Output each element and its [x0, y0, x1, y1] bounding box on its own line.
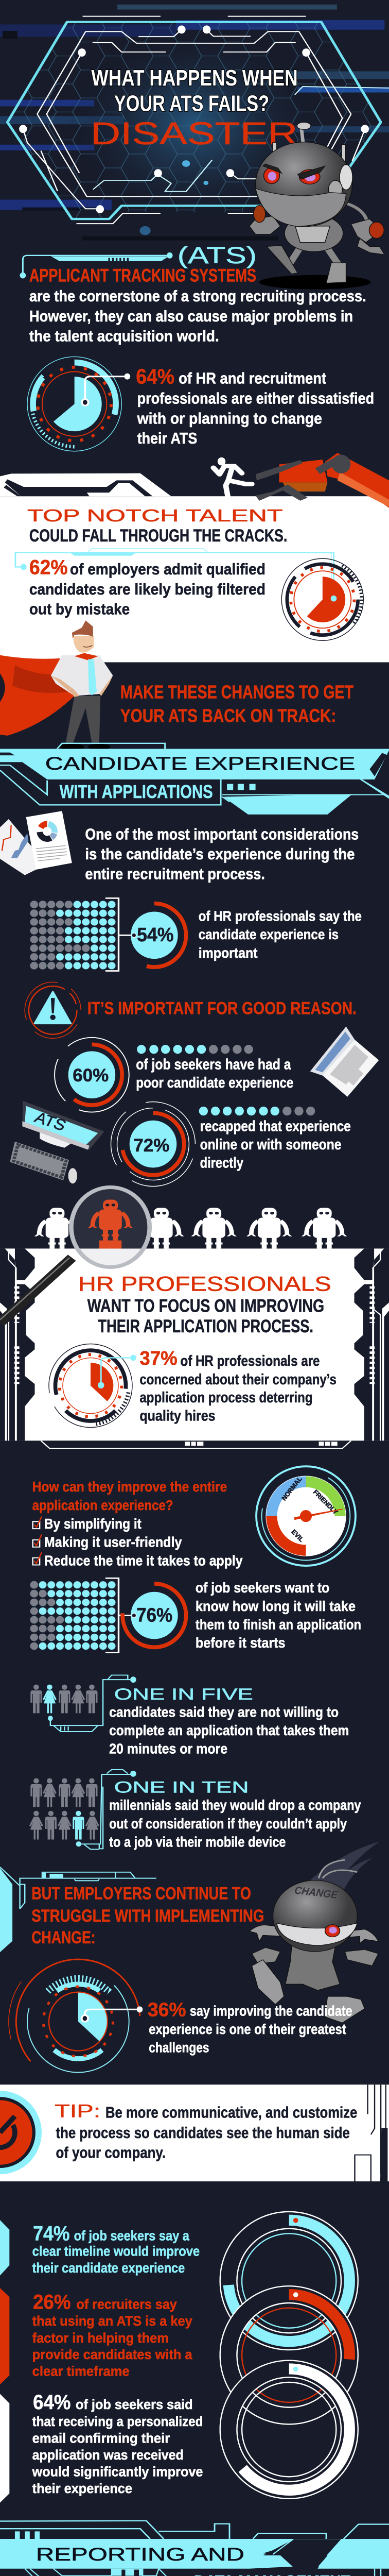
stat: 54%: candidate experience is — [199, 926, 339, 943]
chart: 36% clock — [0, 1934, 166, 2109]
chart: linked rings 64% — [220, 2361, 358, 2499]
stat: 74%: their candidate experience — [32, 2261, 185, 2276]
stat: one in five: 20 minutes or more — [109, 1740, 227, 1757]
stat: 72% — [200, 1117, 351, 1171]
connector: one in five — [48, 1675, 136, 1732]
panel: top notch talent — [0, 496, 389, 662]
panel tab: white tech shape — [0, 473, 171, 496]
stat: 26%: provide candidates with a — [32, 2347, 192, 2362]
heading: employers continue to struggle: CHANGE: — [31, 1928, 96, 1947]
robot mascot — [250, 122, 384, 289]
banner: reporting and data management: REPORTING AND — [36, 2544, 244, 2565]
stat: 60%: of job seekers have had a — [136, 1056, 291, 1073]
stat: 26%: of recruiters say — [77, 2297, 177, 2312]
stat: 62%: candidates are likely being filtered — [29, 581, 266, 598]
banner: candidate experience: CANDIDATE EXPERIENCE — [45, 754, 355, 774]
list: how can they improve — [32, 1479, 243, 1569]
list: how can they improve: By simplifying it — [44, 1516, 142, 1532]
stat: 26%: that using an ATS is a key — [32, 2314, 192, 2329]
chart: 76% gauge — [105, 1578, 186, 1653]
connector: 62% — [15, 549, 333, 599]
list: how can they improve: Reduce the time it takes to apply — [44, 1552, 243, 1569]
chart: 54% dot grid — [30, 900, 116, 970]
stat: 64%: their ATS — [137, 430, 197, 447]
banner: reporting and data management — [0, 2521, 389, 2576]
banner: candidate experience — [0, 743, 389, 815]
text: tip 1: of your company. — [56, 2144, 166, 2162]
deco: tip 1 right tech — [355, 2084, 387, 2181]
chart: 64% clock — [26, 356, 122, 452]
stat: 64% job seekers: their experience — [32, 2481, 132, 2496]
list: how can they improve: How can they improve the entire — [32, 1479, 227, 1495]
illustration: change gremlin robot — [250, 1841, 380, 2023]
panel: HR professionals — [0, 1248, 389, 1448]
stat: 54%: important — [199, 945, 257, 961]
title: disaster: DISASTER — [91, 116, 298, 151]
banner: candidate experience: WITH APPLICATIONS — [60, 781, 213, 802]
chart: 60% gauge — [40, 1022, 144, 1127]
stat: 36%: challenges — [149, 2040, 209, 2056]
chart: 62% clock — [269, 546, 376, 653]
list: how can they improve: Making it user-friendly — [44, 1534, 182, 1550]
illustration: caped hero — [0, 620, 113, 750]
panel: dark section — [0, 662, 389, 1274]
text: tip 1 — [55, 2101, 357, 2162]
robots row — [34, 1208, 347, 1248]
stat: 64% job seekers: of job seekers said — [76, 2397, 193, 2412]
stat: 62%: of employers admit qualified — [70, 561, 266, 578]
stat: 74% — [32, 2223, 200, 2276]
chart: 54% gauge: 54% — [137, 924, 174, 945]
stat: 64%: with or planning to change — [137, 410, 322, 428]
icon: stopwatch badge — [0, 2091, 42, 2174]
stat: one in ten: to a job via their mobile device — [109, 1834, 286, 1850]
heading: applicant tracking systems: APPLICANT TRACKING SYSTEMS — [29, 265, 256, 286]
stat: one in five — [109, 1685, 349, 1757]
heading: HR professionals — [78, 1273, 331, 1336]
stat: 62%: 62% — [29, 556, 68, 579]
icon: ATS computer — [10, 1101, 104, 1183]
icon: personality gauge: EVIL — [290, 1528, 305, 1544]
text: most important considerations: entire recruitment process. — [85, 866, 265, 883]
stat: 26% — [32, 2291, 192, 2379]
heading: HR professionals: HR PROFESSIONALS — [78, 1273, 331, 1296]
stat: 26%: clear timeframe — [32, 2364, 130, 2379]
stat: 36% — [148, 1999, 352, 2056]
stat: 37% — [139, 1347, 337, 1424]
stat: 76%: of job seekers want to — [196, 1580, 329, 1596]
chart: linked rings 26% — [220, 2286, 358, 2424]
stat: 36%: 36% — [148, 1999, 186, 2021]
chart: 37% clock — [46, 1341, 135, 1430]
stat: 64%: 64% — [136, 365, 174, 388]
icon: personality gauge — [245, 1455, 366, 1577]
stat: 37%: application process deterring — [139, 1389, 313, 1405]
connector: 36% — [82, 2006, 143, 2022]
chart: 54% gauge — [105, 898, 186, 971]
stat: 72%: directly — [200, 1154, 243, 1171]
icon: personality gauge: FRIENDLY — [312, 1488, 340, 1516]
stat: 37%: quality hires — [139, 1408, 216, 1424]
chart: 76% gauge: 76% — [136, 1604, 172, 1626]
stat: 76%: before it starts — [196, 1635, 285, 1651]
chart: linked rings 74% — [220, 2212, 358, 2350]
colored side bars — [0, 2220, 9, 2503]
title: YOUR ATS FAILS? — [114, 91, 269, 116]
intro paragraph — [29, 287, 366, 345]
stat: 60%: poor candidate experience — [136, 1074, 293, 1091]
heading: ATS: (ATS) — [178, 242, 257, 268]
stat: 64% job seekers: 64% — [33, 2391, 70, 2414]
icon: ATS computer: ATS — [32, 1109, 69, 1134]
stat: one in ten — [109, 1778, 361, 1850]
stat: 64% — [136, 365, 374, 447]
icon: one in ten people — [29, 1778, 99, 1840]
stat: 37%: of HR professionals are — [181, 1352, 320, 1369]
icon: laptop — [310, 1026, 379, 1097]
stat: 64% job seekers: email confirming their — [32, 2431, 170, 2446]
connector dot: 62% — [331, 596, 337, 602]
heading: employers continue to struggle: BUT EMPLOYERS CONTINUE TO — [31, 1884, 251, 1903]
stat: 26%: 26% — [33, 2291, 70, 2314]
intro paragraph: the talent acquisition world. — [29, 328, 219, 345]
stat: 74%: 74% — [33, 2223, 69, 2245]
heading: make these changes — [120, 681, 353, 726]
title — [91, 66, 298, 116]
connector: one in ten — [76, 1770, 136, 1850]
hero background streaks and honeycomb — [0, 5, 389, 241]
stat: 62% — [29, 556, 266, 618]
chart: 60% gauge: 60% — [73, 1065, 109, 1086]
chart: 72% gauge — [104, 1095, 202, 1193]
panel: tip 1 — [0, 2084, 389, 2181]
illustration: change gremlin robot: CHANGE — [294, 1884, 339, 1901]
dots: 72% — [199, 1107, 315, 1115]
text: tip 1: TIP: — [55, 2101, 100, 2122]
stat: 54% — [199, 908, 362, 961]
stat: 64% job seekers — [32, 2391, 203, 2496]
list: how can they improve: application experience? — [32, 1497, 173, 1513]
stat: 64%: of HR and recruitment — [179, 370, 326, 387]
text: most important considerations — [85, 826, 359, 883]
ats connector — [20, 252, 173, 279]
connector: 37% — [98, 1354, 136, 1388]
icon: warning triangle — [14, 972, 91, 1048]
heading: top notch talent: TOP NOTCH TALENT — [27, 506, 283, 525]
stat: one in ten: ONE IN TEN — [114, 1778, 249, 1797]
stat: 74%: clear timeline would improve — [32, 2244, 200, 2259]
icon: running man — [214, 457, 252, 496]
dots: 60% — [137, 1045, 253, 1054]
hero frame: circuit hexagon — [7, 16, 389, 224]
icon: personality gauge: NORMAL — [280, 1475, 304, 1502]
stat: 62%: out by mistake — [29, 601, 130, 618]
stat: 76% — [196, 1580, 361, 1651]
chart: 72% gauge: 72% — [133, 1135, 169, 1156]
icon: magnifier over robots — [0, 1187, 150, 1323]
icon: one in five people — [30, 1685, 97, 1713]
stat: one in five: ONE IN FIVE — [114, 1685, 253, 1703]
icon: report papers — [0, 811, 72, 875]
heading: employers continue to struggle: STRUGGLE WITH IMPLEMENTING — [31, 1906, 264, 1926]
tab: employers struggle frame — [0, 1867, 156, 1952]
icon: robotic claw — [256, 453, 389, 508]
stat: 64% job seekers: application was received — [32, 2447, 184, 2463]
heading: employers continue to struggle — [31, 1884, 264, 1947]
stat: 37%: 37% — [139, 1347, 178, 1369]
stat: 26%: factor in helping them — [32, 2330, 169, 2346]
stat: 64% job seekers: that receiving a personalized — [32, 2414, 203, 2429]
stat: 74%: of job seekers say a — [74, 2228, 189, 2244]
stat: 60% — [136, 1056, 293, 1091]
chart: 76% dot grid — [30, 1581, 116, 1650]
connector: 64% — [82, 374, 130, 405]
stat: 64% job seekers: would significantly improve — [32, 2464, 203, 2480]
